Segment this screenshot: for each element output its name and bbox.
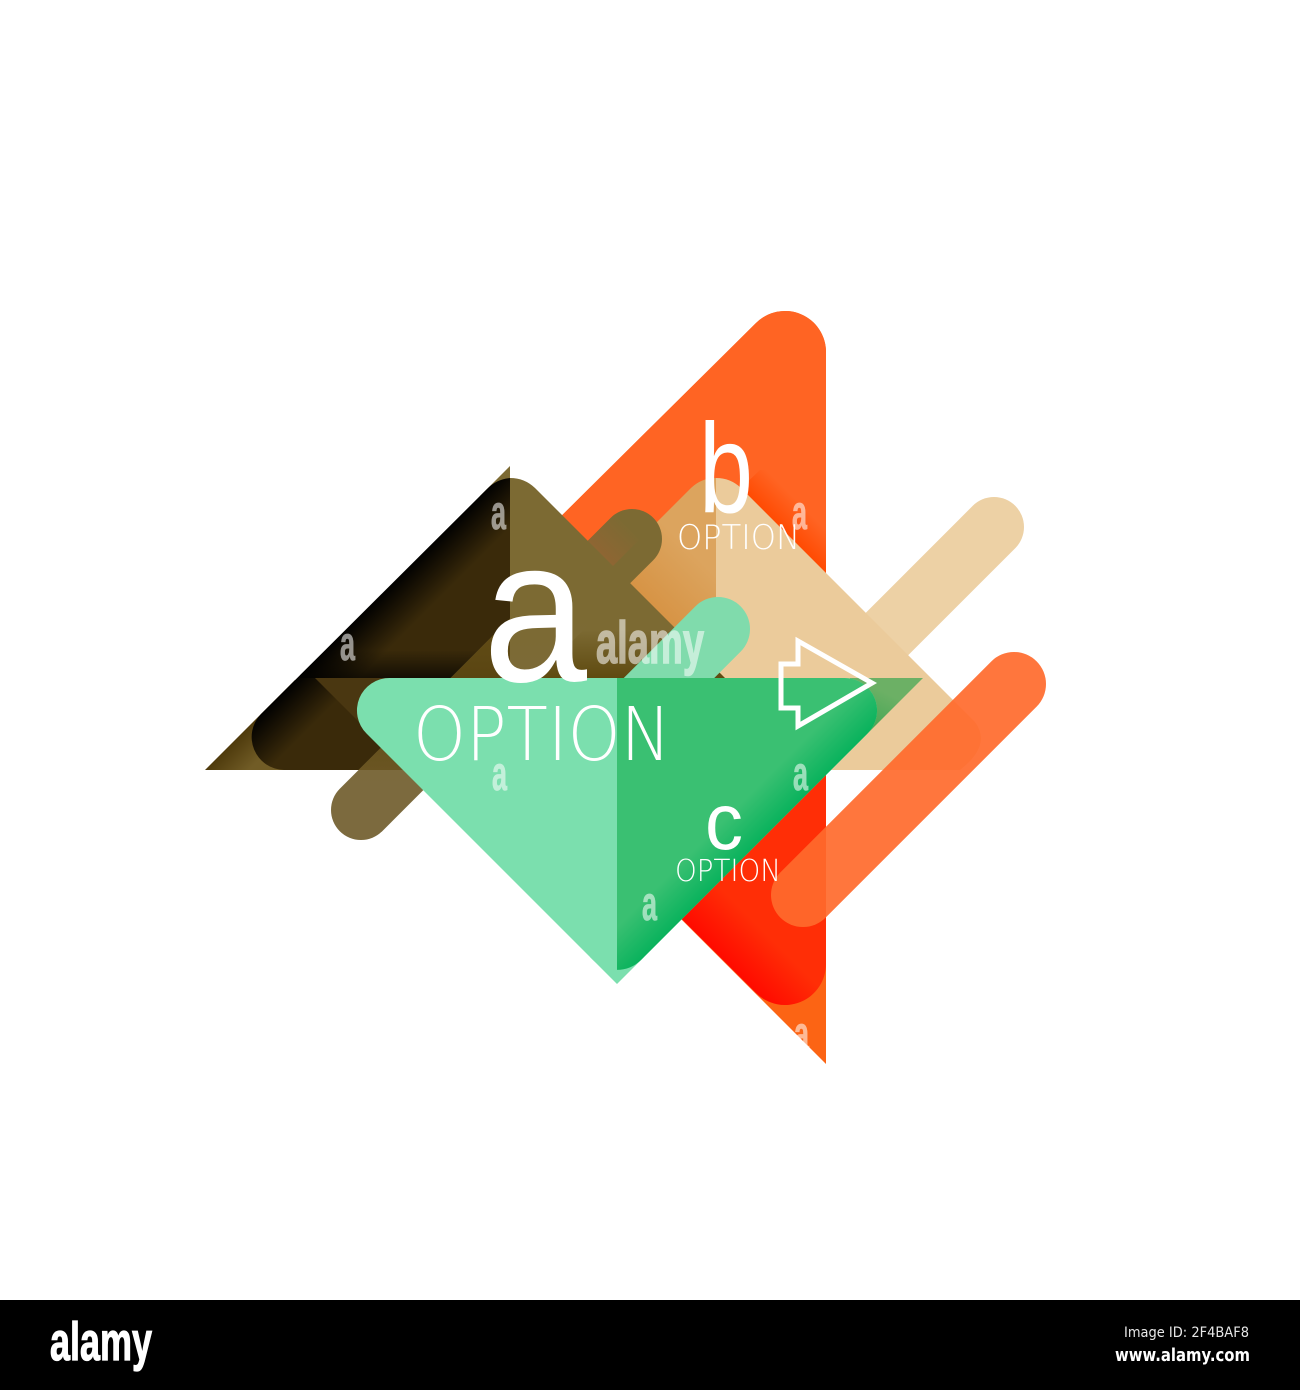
footer bar	[0, 1300, 1300, 1390]
label a: a	[483, 496, 588, 725]
watermark: alamy	[596, 610, 704, 676]
peach triangle	[409, 478, 981, 770]
brown bar	[361, 514, 640, 810]
watermark: a	[642, 878, 657, 931]
orange bar	[803, 684, 1014, 895]
green bar	[640, 629, 718, 707]
sharp green triangle pieces	[315, 678, 923, 984]
rounded green triangle	[357, 678, 877, 970]
label c: c	[705, 777, 743, 866]
watermark: a	[492, 748, 507, 801]
label c	[675, 777, 781, 889]
label b caption: OPTION	[677, 518, 800, 558]
brown triangle	[205, 466, 725, 770]
watermark	[340, 487, 809, 1061]
footer logo: alamy	[50, 1312, 152, 1372]
label a caption: OPTION	[413, 692, 671, 778]
website: www.alamy.com	[1115, 1345, 1250, 1366]
watermark: a	[793, 748, 808, 801]
icon: outlined arrow	[781, 641, 872, 726]
image id: Image ID: 2F4BAF8	[1124, 1325, 1249, 1341]
watermark: a	[340, 618, 355, 671]
watermark: a	[794, 1008, 809, 1061]
label a	[413, 496, 671, 778]
label b	[677, 397, 800, 558]
watermark: a	[792, 487, 807, 540]
infographic canvas	[0, 311, 1300, 1390]
peach bar	[850, 527, 994, 671]
orange triangle	[419, 311, 826, 1064]
watermark: a	[491, 487, 506, 540]
label c caption: OPTION	[675, 854, 781, 889]
label b: b	[699, 397, 753, 539]
